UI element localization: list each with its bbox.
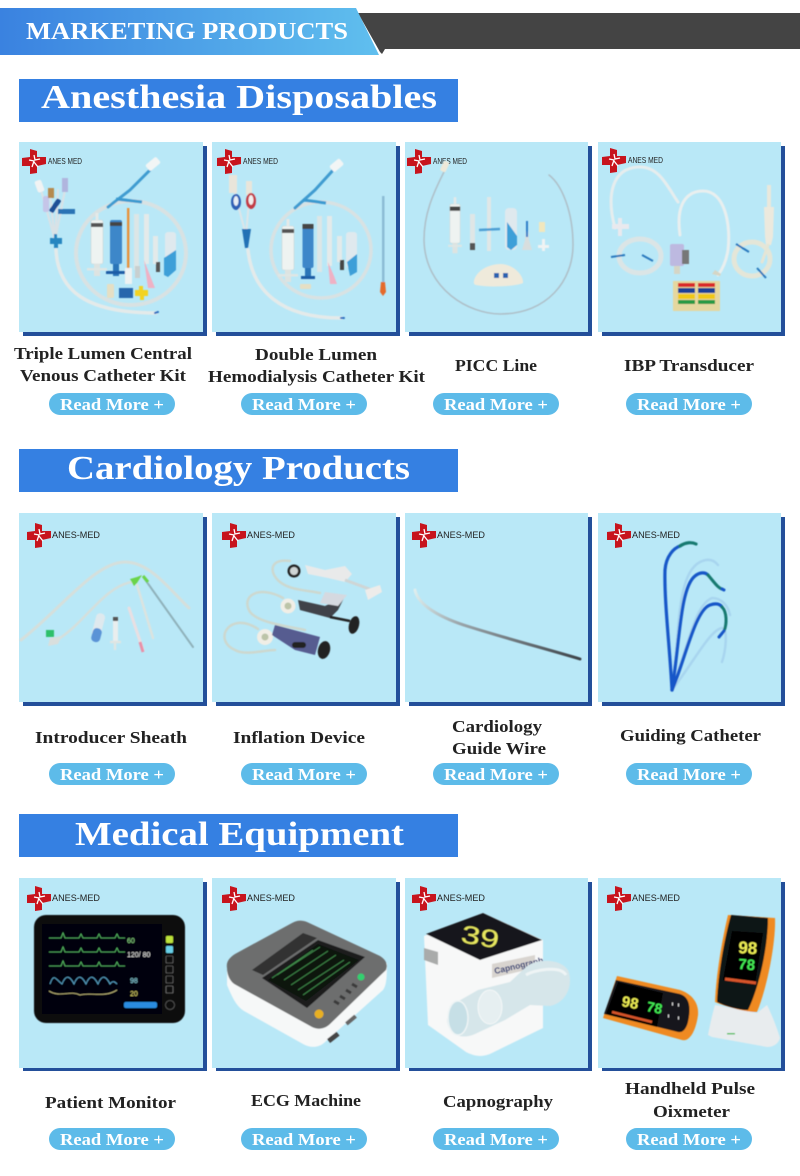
button: Read More + [252,765,356,784]
button: Read More + [444,1130,548,1149]
logo [27,523,100,548]
product: Introducer Sheath [19,513,207,706]
oximeter drawing: 78 [645,998,664,1017]
product: Triple Lumen Central Venous Catheter Kit [19,142,207,336]
catheter curves drawing [665,543,730,690]
button: Read More + [637,1130,741,1149]
label: Capnography [443,1092,554,1111]
label: PICC Line [455,356,537,375]
label: Double Lumen [255,345,377,364]
oximeter drawing: 98 [620,993,640,1013]
product: Cardiology Guide Wire [405,513,592,706]
heading: Anesthesia Disposables: Anesthesia Disposables [41,79,437,116]
logo [407,149,467,174]
capnograph drawing: Capnograph [493,955,544,976]
label: IBP Transducer [624,356,754,375]
button: Read More + [637,395,741,414]
monitor drawing: 120/ 80 [127,952,150,959]
label [452,717,546,758]
label: Triple Lumen Central [14,344,192,363]
label [14,344,192,385]
product: Capnography [405,878,592,1071]
monitor drawing [34,915,185,1023]
label: Inflation Device [233,728,365,747]
logo: ANES MED [433,156,467,166]
product: Inflation Device [212,513,400,706]
heading: Cardiology Products: Cardiology Products [67,450,410,487]
logo: ANES-MED [632,530,680,541]
button [49,1128,175,1150]
button [241,763,367,785]
ECG machine drawing [227,921,387,1047]
logo [607,886,680,911]
button [433,393,559,415]
logo [217,149,278,174]
monitor drawing: 60 [127,938,135,945]
capnograph drawing: 39 [459,920,501,955]
oximeter drawing: 98 [738,938,758,958]
product: Patient Monitor [19,878,207,1071]
logo [607,523,680,548]
label: Patient Monitor [45,1093,176,1112]
label: Guiding Catheter [620,726,761,745]
button [626,393,752,415]
label: Cardiology [452,717,543,736]
logo [27,886,100,911]
button: Read More + [252,1130,356,1149]
button: Read More + [444,765,548,784]
logo [222,523,295,548]
button [626,1128,752,1150]
heading: Cardiology Products [19,449,458,492]
top banner [0,8,800,55]
button [241,1128,367,1150]
button: Read More + [60,395,164,414]
label: Venous Catheter Kit [20,366,187,385]
capnograph drawing [424,913,570,1056]
heading: Medical Equipment [19,814,458,857]
label: Oixmeter [653,1102,730,1121]
label: Guide Wire [452,739,546,758]
button [433,1128,559,1150]
product: Handheld Pulse Oximeter [598,878,785,1071]
logo [412,886,485,911]
oximeter drawing: 78 [738,956,756,974]
button: Read More + [444,395,548,414]
label [625,1079,755,1121]
logo [412,523,485,548]
heading: Anesthesia Disposables [19,79,458,122]
guide wire drawing [415,590,580,659]
product: IBP Transducer [598,142,785,336]
button: Read More + [60,765,164,784]
button [433,763,559,785]
logo: ANES-MED [632,893,680,904]
label: Introducer Sheath [35,728,187,747]
sheath drawing [21,562,193,652]
logo: ANES-MED [52,893,100,904]
button: Read More + [60,1130,164,1149]
logo: ANES-MED [247,893,295,904]
banner title: MARKETING PRODUCTS [26,19,348,45]
logo: ANES MED [628,155,663,165]
button: Read More + [252,395,356,414]
logo: ANES-MED [52,530,100,541]
label [208,345,426,386]
logo [222,886,295,911]
oximeter drawing [603,915,780,1047]
button [49,393,175,415]
catheter kit drawing [229,158,386,318]
inflation device drawing [224,561,382,660]
label: ECG Machine [251,1091,361,1110]
monitor drawing: 98 [130,978,138,985]
label: Handheld Pulse [625,1079,755,1098]
transducer drawing [611,167,774,311]
button [241,393,367,415]
logo: ANES MED [48,156,82,166]
logo [602,148,663,173]
product: Guiding Catheter [598,513,785,706]
product: ECG Machine [212,878,400,1071]
product: Double Lumen Hemodialysis Catheter Kit [212,142,400,336]
logo: ANES-MED [437,530,485,541]
button: Read More + [637,765,741,784]
catheter kit drawing [34,156,186,313]
product: PICC Line [405,142,592,336]
logo: ANES MED [243,156,278,166]
logo: ANES-MED [437,893,485,904]
button [626,763,752,785]
logo [22,149,82,174]
heading: Medical Equipment: Medical Equipment [75,816,405,853]
PICC kit drawing [424,160,573,314]
button [49,763,175,785]
monitor drawing: 20 [130,991,138,998]
label: Hemodialysis Catheter Kit [208,367,426,386]
logo: ANES-MED [247,530,295,541]
